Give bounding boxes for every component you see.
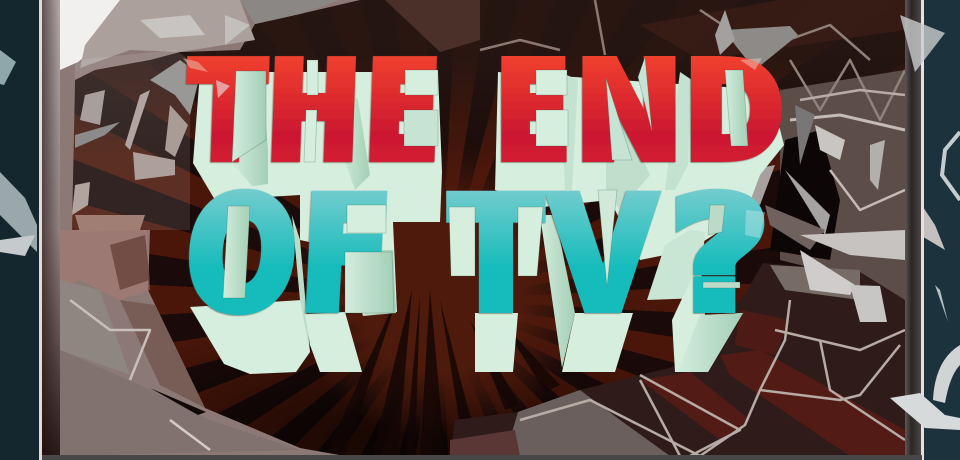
headline: THE: T [186, 36, 267, 189]
headline: END: D [684, 36, 784, 190]
headline: TV?: V [550, 166, 656, 345]
broken glass left side [60, 0, 360, 456]
3D extrusion of THE [193, 72, 442, 312]
headline: END: N [575, 36, 683, 190]
headline: THE: E [362, 36, 443, 189]
3D extrusion of OF [190, 215, 396, 374]
3D extrusion of END [495, 72, 784, 260]
headline: TV?: T [450, 166, 542, 345]
dark streaks in centre of sunburst [325, 290, 560, 456]
3D extrusion of TV? [475, 215, 743, 372]
dark glass pane upper right [385, 0, 905, 320]
title [182, 36, 784, 345]
headline: OF: O [182, 166, 301, 345]
glass shards left [72, 15, 250, 232]
headline: OF: F [296, 166, 395, 345]
letter counters showing extrusion [223, 57, 748, 313]
translucent glass over title [183, 58, 765, 238]
headline: TV?: ? [670, 166, 770, 345]
bottom right glass pane [450, 250, 905, 456]
headline: END: E [495, 36, 571, 190]
right side glass fragments [715, 10, 945, 322]
headline: THE: H [264, 36, 363, 189]
